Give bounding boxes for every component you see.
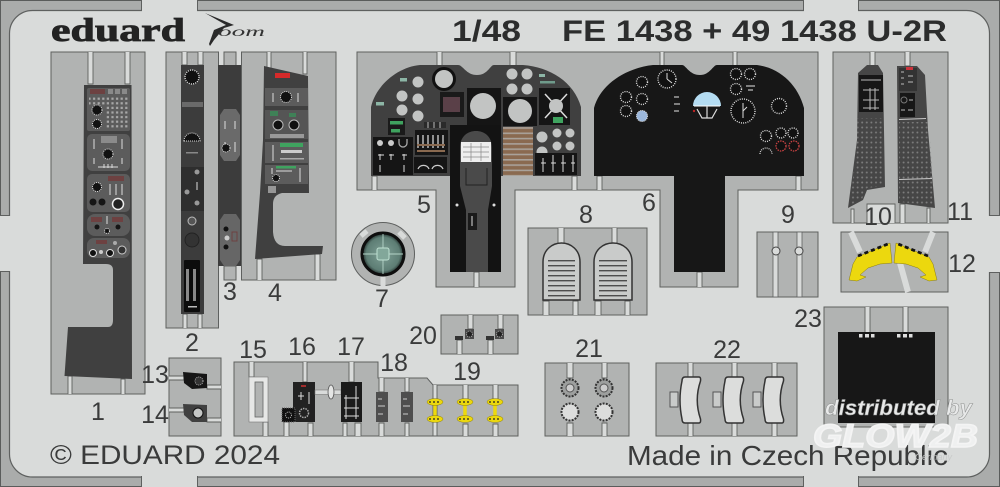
sub panel upper 3 — [220, 109, 240, 161]
scale label: 1/48 — [452, 15, 521, 48]
sprue gaps 20 — [457, 315, 503, 354]
part 12: yellow harness brackets — [841, 232, 948, 292]
ring — [352, 222, 414, 286]
tab bottom 3 — [224, 266, 236, 280]
right dials — [730, 68, 799, 154]
panel body 4 — [255, 66, 323, 259]
rod left — [772, 232, 780, 297]
small lever — [315, 385, 341, 399]
part 10 panel — [848, 65, 885, 208]
part 20: small fittings — [441, 315, 518, 354]
lower left switch panel — [373, 137, 413, 175]
part 11 panel — [897, 66, 935, 208]
part number labels: 8 — [579, 201, 593, 229]
distributor watermark: Germany — [915, 452, 953, 462]
bracket left — [849, 243, 892, 281]
sprue gaps 8 — [543, 228, 630, 315]
copyright: © EDUARD 2024 — [50, 440, 280, 470]
part number labels: 19 — [453, 358, 481, 386]
part number labels: 16 — [288, 333, 316, 361]
product code title: FE 1438 + 49 1438 U-2R — [562, 15, 947, 48]
part number labels: 9 — [781, 201, 795, 229]
brand logo: Zoom — [205, 13, 265, 46]
part 7: round gunsight — [352, 222, 414, 287]
part 23: black plate — [824, 307, 948, 427]
sprue 21 — [545, 363, 629, 436]
placard 2 — [184, 260, 200, 312]
parts 13 and 14: small plates — [169, 358, 221, 436]
vent left — [543, 243, 580, 300]
sprue 2 — [166, 52, 218, 328]
sprue gaps 1 — [68, 52, 130, 394]
part number labels: 20 — [409, 322, 437, 350]
sprue gaps 10 11 — [851, 52, 930, 223]
part number labels: 11 — [947, 198, 973, 226]
panel body 3 — [218, 65, 241, 266]
upper instruments 2 — [182, 70, 203, 154]
warning light — [275, 73, 290, 78]
part number labels — [91, 189, 976, 429]
sub panel lower 3 — [220, 214, 240, 266]
sub panel b — [87, 134, 130, 171]
sprue gaps 2 — [182, 52, 203, 328]
copper strip panel — [503, 127, 533, 176]
part 15 frame — [249, 377, 268, 422]
centre gauges — [440, 88, 537, 126]
sub panel a — [87, 88, 130, 131]
part 5: main instrument panel colour — [357, 52, 818, 287]
part number labels: 22 — [713, 336, 741, 364]
part 4: angled panel — [242, 52, 336, 280]
part 8: vents — [528, 228, 647, 315]
sprue gaps 22 — [688, 363, 777, 436]
sprue 4 — [242, 52, 336, 280]
sub panel c — [87, 174, 130, 212]
part number labels: 10 — [864, 203, 892, 231]
left dials — [620, 70, 680, 122]
bracket right — [894, 243, 937, 281]
left gauge cluster — [376, 67, 456, 135]
made in label: Made in Czech Republic — [627, 440, 948, 471]
part 19 yellow buckles — [427, 399, 503, 422]
ring gaps — [361, 231, 405, 287]
part number labels: 7 — [375, 285, 389, 313]
part number labels: 15 — [239, 336, 267, 364]
sprue 23 — [824, 307, 948, 427]
vent right — [594, 243, 632, 300]
sprue gaps 23 — [865, 307, 908, 333]
sprue 8 — [528, 228, 647, 315]
panel body 2 — [181, 65, 204, 314]
right top gauges — [506, 68, 570, 125]
part 9: rods — [757, 232, 818, 297]
plate b — [713, 377, 744, 423]
plate c — [753, 377, 784, 423]
part number labels: 17 — [337, 333, 365, 361]
distributor watermark: GLOW2B — [813, 418, 978, 454]
lens — [362, 233, 404, 275]
sprue 9 — [757, 232, 818, 297]
sprue gaps 5 and 6 — [372, 52, 801, 287]
lower controls 2 — [181, 167, 204, 247]
part number labels: 5 — [417, 191, 431, 219]
lower right gauges — [535, 128, 577, 175]
plate 14 — [183, 404, 207, 422]
console body — [64, 85, 132, 379]
distributor watermark — [813, 397, 978, 462]
crosshair — [363, 234, 403, 274]
part 22: curved plates — [656, 363, 797, 436]
sub panel e — [87, 238, 130, 258]
sprue gaps 12 — [851, 232, 933, 292]
part 17 plate — [341, 382, 362, 422]
sprue 15-19 — [234, 362, 518, 436]
tab top 3 — [224, 52, 236, 66]
attitude indicator — [693, 92, 721, 118]
part number labels: 21 — [575, 335, 603, 363]
sprue gaps 4 — [257, 52, 320, 280]
centre stem — [450, 125, 501, 272]
black plate — [838, 332, 935, 423]
sprue 5 and 6 — [357, 52, 818, 287]
sprue 10 11 — [833, 52, 948, 223]
part number labels: 18 — [380, 349, 408, 377]
plate 13 — [183, 372, 207, 389]
sub panel d — [87, 214, 130, 236]
parts 10 and 11: tapered panels — [833, 52, 948, 223]
part 18 plates — [376, 392, 413, 422]
sub panel rows — [265, 88, 308, 193]
brand logo: eduard: eduard — [51, 13, 185, 49]
sprue 20 — [441, 315, 518, 354]
part number labels: 6 — [642, 189, 656, 217]
part 1: side console — [51, 52, 145, 394]
sprue 1 — [51, 52, 145, 394]
brand logo: Zoom: oom — [218, 25, 265, 40]
sprue 13 14 — [169, 358, 221, 436]
part number labels: 12 — [948, 250, 976, 278]
rod right — [795, 232, 803, 297]
parts 15 to 19 sprue — [234, 362, 518, 436]
sprue gaps 21 — [567, 363, 607, 436]
part 3: narrow panel — [218, 52, 241, 280]
part number labels: 4 — [268, 279, 282, 307]
part number labels: 1 — [91, 398, 105, 426]
part 2: narrow panel — [166, 52, 218, 328]
part 21: gear wheels — [545, 363, 629, 436]
part 16 plate — [282, 382, 315, 422]
part 6: black instrument panel — [594, 65, 804, 272]
part number labels: 14 — [141, 401, 169, 429]
part number labels: 13 — [141, 361, 169, 389]
sprue 12 — [841, 232, 948, 292]
distributor watermark: distributed by — [825, 397, 973, 420]
mounting holes — [859, 334, 912, 338]
wheels — [562, 380, 612, 420]
part number labels: 3 — [223, 278, 237, 306]
fittings — [455, 329, 504, 340]
panel body 5 — [371, 65, 581, 272]
sprue gaps 15-19 — [249, 362, 498, 436]
centre left switch panel — [414, 122, 448, 173]
part number labels: 23 — [794, 305, 822, 333]
sprue gaps 13 14 — [169, 376, 221, 422]
sprue 22 — [656, 363, 797, 436]
plate a — [670, 377, 701, 423]
part number labels: 2 — [185, 329, 199, 357]
panel body 6 — [594, 65, 804, 272]
